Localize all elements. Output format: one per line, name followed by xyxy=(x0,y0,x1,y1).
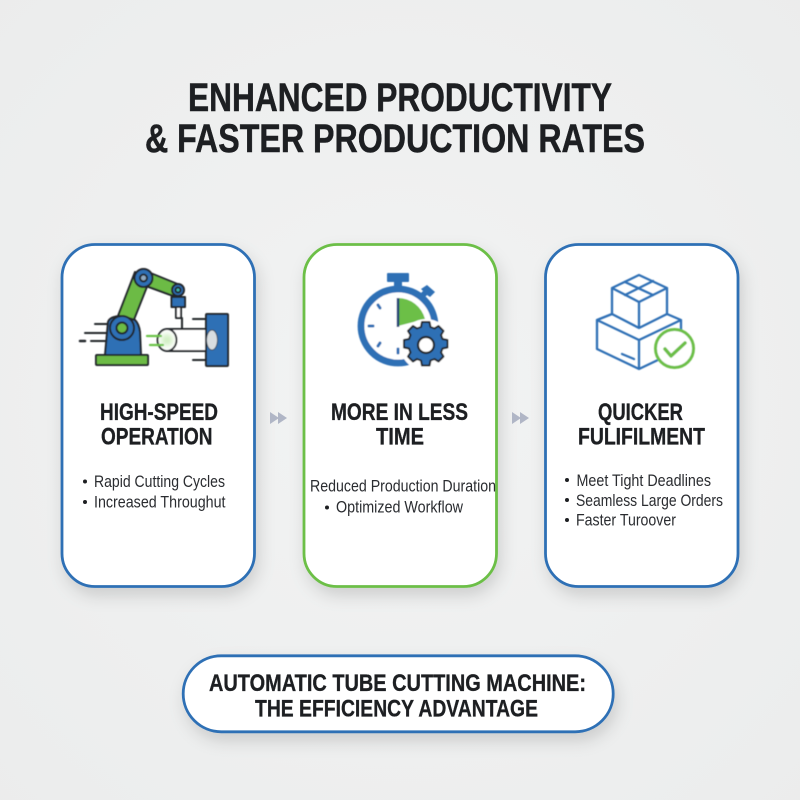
icon: stopwatch with gear xyxy=(361,273,452,371)
heading: quicker fulifilment xyxy=(578,399,705,450)
icon: robotic arm cutting a tube xyxy=(80,269,228,366)
heading: more in less time: MORE IN LESS xyxy=(331,399,468,426)
title: ENHANCED PRODUCTIVITY xyxy=(188,76,612,120)
bullet list: quicker fulfilment: Faster Turoover xyxy=(576,512,676,530)
panel: high-speed operation xyxy=(62,244,254,586)
bullet list: quicker fulfilment: Meet Tight Deadlines xyxy=(576,472,711,490)
arrow: first to second panel xyxy=(270,412,287,424)
panel: quicker fulfilment xyxy=(546,244,738,586)
title xyxy=(145,76,645,161)
heading: high-speed operation: HIGH-SPEED xyxy=(100,399,218,426)
callout: efficiency advantage pill: THE EFFICIENCY ADVANTAGE xyxy=(255,696,538,722)
bullet list: high-speed operation xyxy=(83,473,226,512)
bullet list: more in less time xyxy=(310,478,496,516)
heading: more in less time: TIME xyxy=(376,424,424,450)
bullet list: quicker fulfilment xyxy=(565,472,723,530)
icon: stacked boxes with check mark xyxy=(597,275,694,369)
heading: quicker fulifilment: FULIFILMENT xyxy=(578,424,705,450)
heading: high-speed operation xyxy=(100,399,218,450)
bullet list: more in less time: Optimized Workflow xyxy=(336,498,463,516)
callout: efficiency advantage pill xyxy=(183,656,613,732)
heading: high-speed operation: OPERATION xyxy=(101,424,212,450)
panel: more in less time xyxy=(304,244,496,586)
bullet list: high-speed operation: Increased Throughut xyxy=(94,494,226,512)
bullet list: high-speed operation: Rapid Cutting Cycles xyxy=(94,473,225,491)
callout: efficiency advantage pill: AUTOMATIC TUBE CUTTING MACHINE: xyxy=(209,670,586,697)
bullet list: quicker fulfilment: Seamless Large Orders xyxy=(576,492,723,510)
heading: quicker fulifilment: QUICKER xyxy=(598,399,683,426)
title: & FASTER PRODUCTION RATES xyxy=(145,117,645,161)
heading: more in less time xyxy=(331,399,468,450)
bullet list: more in less time: Reduced Production Duration xyxy=(310,478,496,496)
arrow: second to third panel xyxy=(512,412,529,424)
